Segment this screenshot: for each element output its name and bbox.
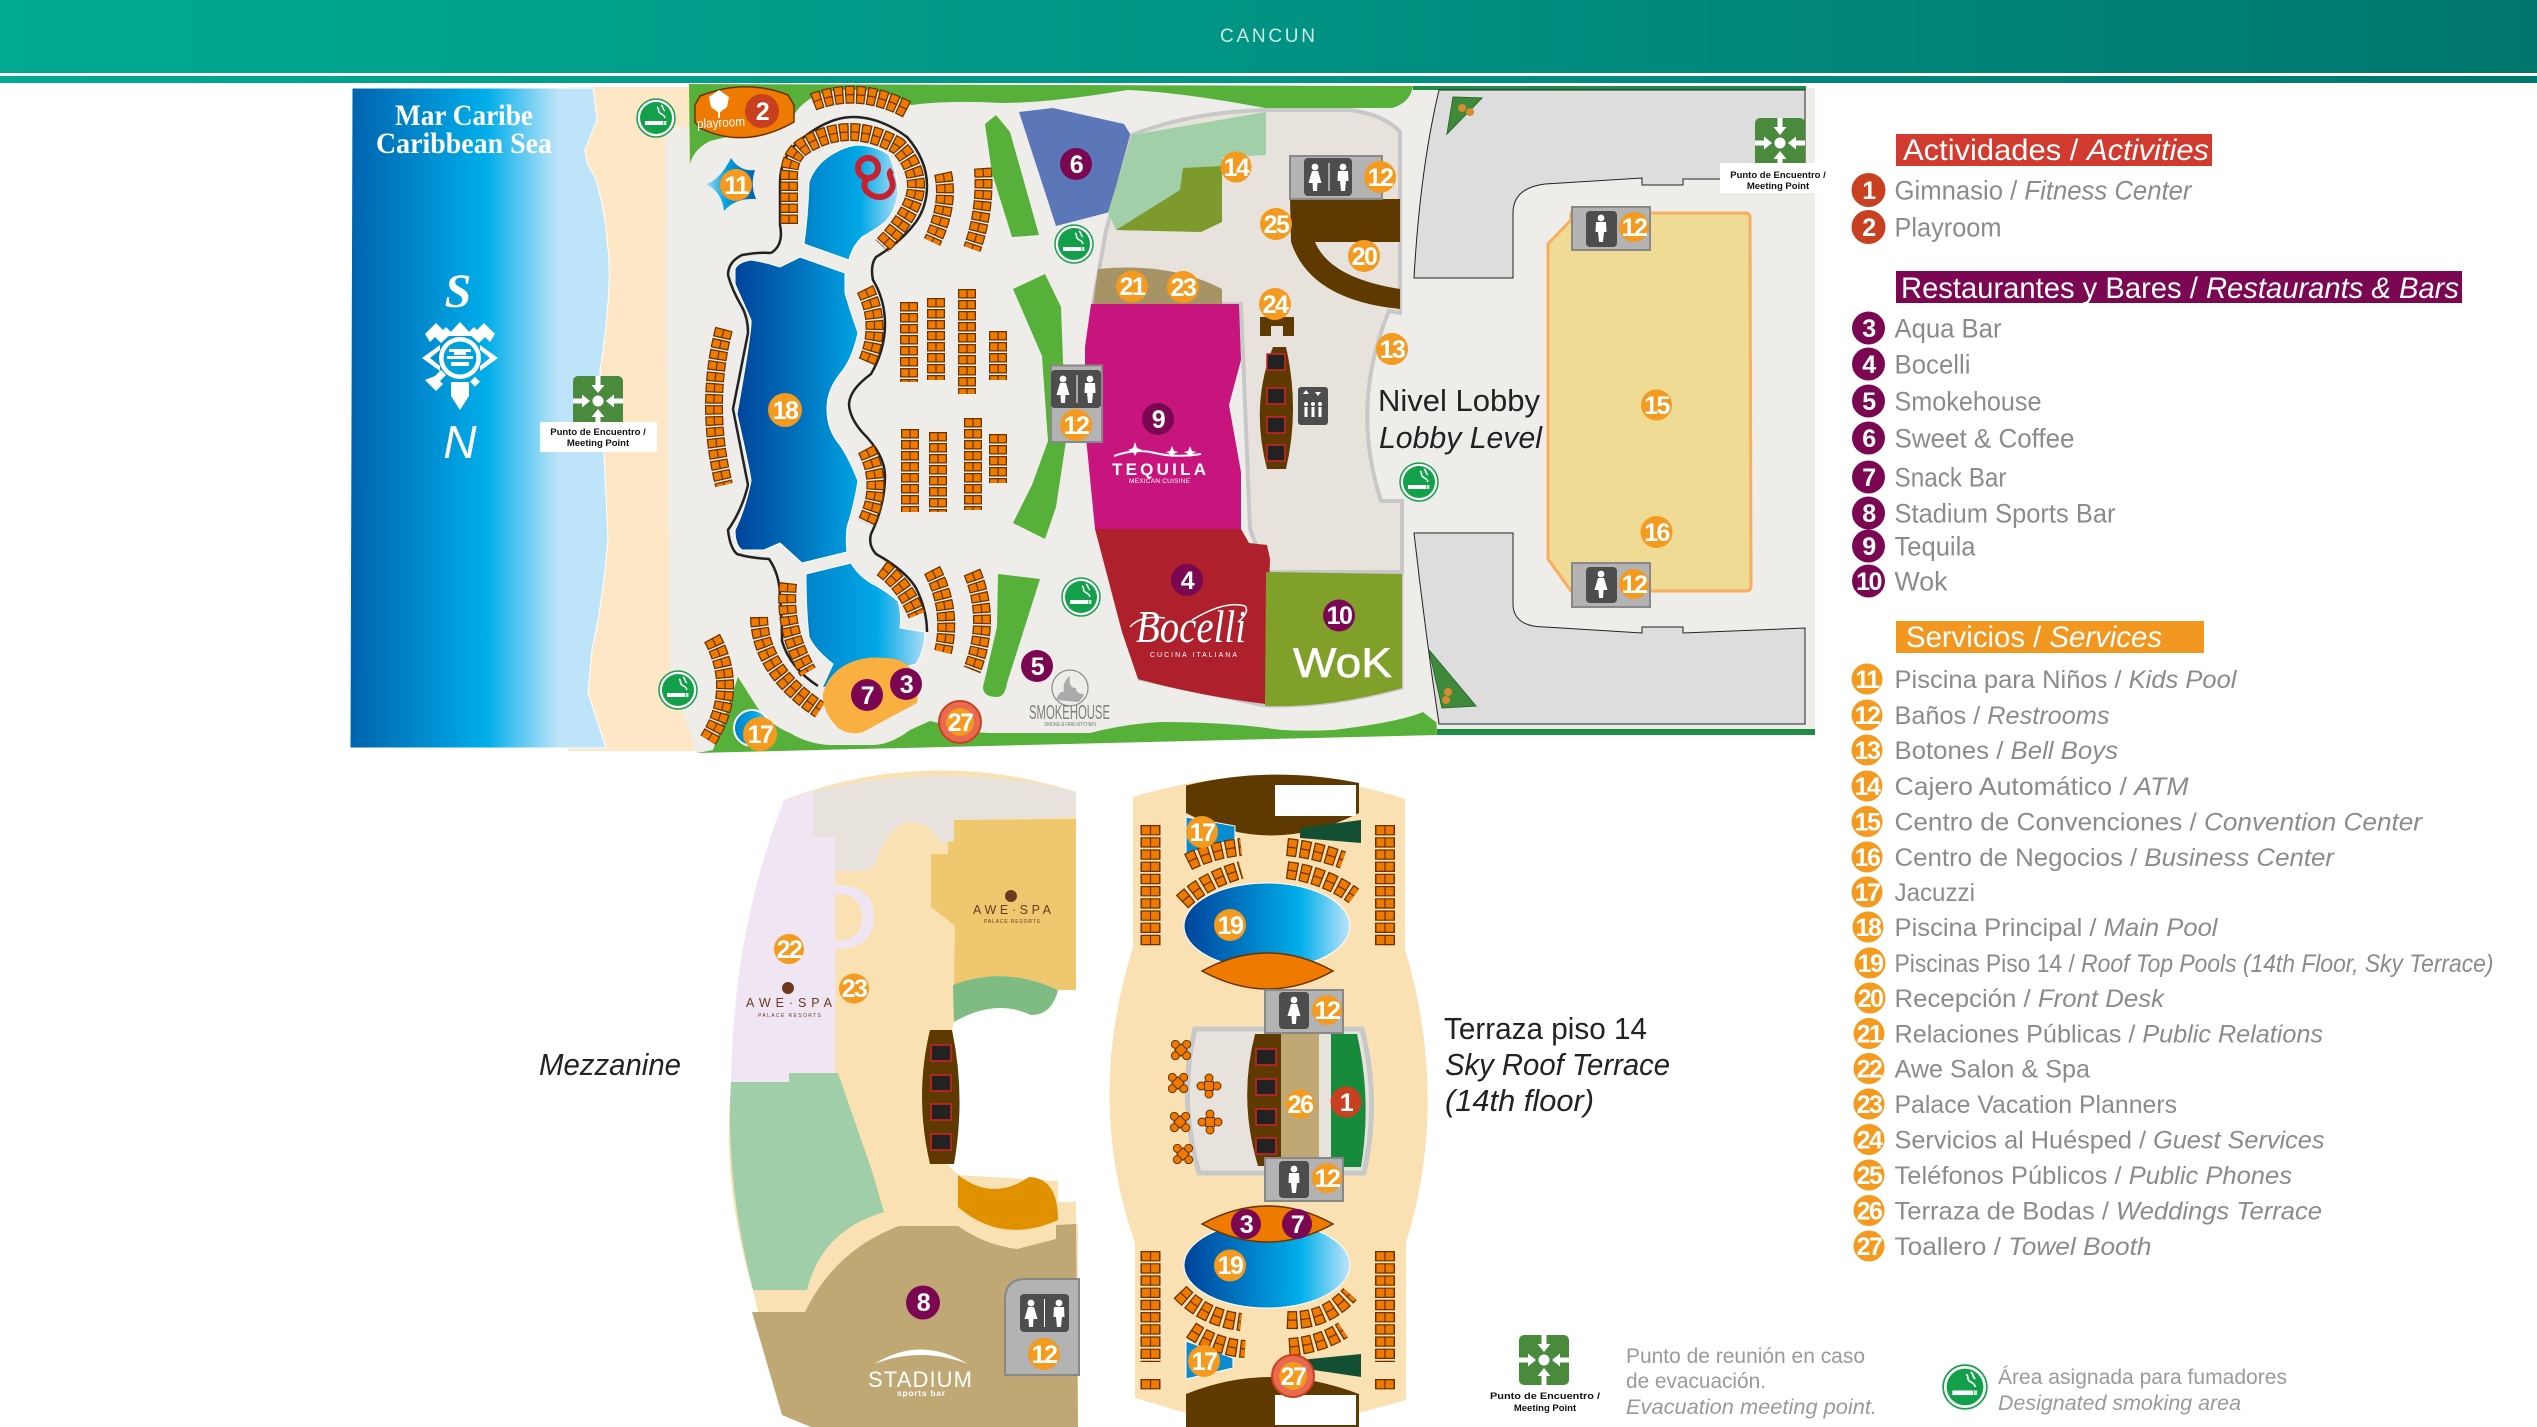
item 23: Palace Vacation Planners <box>1894 1091 2177 1119</box>
marker 12: 12 <box>1032 1341 1057 1369</box>
meeting point beach: Meeting Point <box>567 438 630 449</box>
item 27: 27 <box>1857 1233 1882 1261</box>
compass <box>422 265 498 468</box>
item 3 <box>1852 312 2002 344</box>
restroom west <box>1051 366 1102 442</box>
marker 7 <box>851 679 883 711</box>
restroom terrace north <box>1265 990 1343 1033</box>
terrace heading: Sky Roof Terrace <box>1445 1047 1670 1082</box>
compass: S <box>445 265 471 318</box>
item 13: Botones / Bell Boys <box>1894 737 2118 765</box>
bottom pool lobe <box>806 563 925 688</box>
marker 20 <box>1348 240 1380 272</box>
marker 13: 13 <box>1380 336 1405 364</box>
meeting point lobby: Meeting Point <box>1747 181 1810 192</box>
mezzanine base <box>729 770 1078 1427</box>
marker 19 <box>1214 1250 1246 1282</box>
marker 17: 17 <box>1192 1348 1217 1376</box>
marker 16 <box>1640 516 1672 548</box>
kids pool <box>706 158 756 211</box>
playroom: playroom <box>697 114 745 131</box>
lens bar north <box>1202 953 1333 989</box>
terrace heading: (14th floor) <box>1445 1083 1594 1118</box>
bocelli restaurant: CUCINA ITALIANA <box>1150 652 1237 659</box>
item 27: Toallero / Towel Booth <box>1894 1233 2152 1261</box>
smokehouse logo: SMOKE & FIRE KITCHEN <box>1044 722 1096 728</box>
tequila restaurant: TEQUILA <box>1112 460 1206 479</box>
sea label: Mar Caribe <box>395 99 533 132</box>
marker 7 <box>1282 1209 1312 1239</box>
terrace side sunbeds <box>1150 825 1385 1390</box>
item 20: 20 <box>1858 985 1883 1013</box>
playroom <box>695 87 794 138</box>
awe spa gym <box>931 819 1076 990</box>
marker 27: 27 <box>1281 1363 1306 1391</box>
marker 23: 23 <box>842 975 867 1003</box>
marker 8: 8 <box>917 1289 931 1317</box>
meeting point note: de evacuación. <box>1626 1370 1766 1393</box>
central block <box>1187 1029 1372 1173</box>
top pool lobe <box>804 145 898 260</box>
upper terrace <box>813 776 1076 871</box>
map markers <box>720 148 1672 751</box>
pool outline <box>728 117 927 686</box>
item 21: 21 <box>1857 1020 1883 1048</box>
north wing <box>1414 90 1805 278</box>
planter north <box>1447 97 1482 134</box>
bocelli restaurant <box>1095 529 1270 704</box>
terrace heading <box>1444 1011 1670 1118</box>
icon: smoking <box>1943 1365 1987 1409</box>
panel: legend restaurants <box>1852 271 2462 598</box>
wok restaurant <box>1265 572 1402 706</box>
marker 3: 3 <box>900 671 913 699</box>
marker 11 <box>720 169 752 201</box>
mezzanine elevators <box>922 1030 960 1164</box>
meeting point lobby: Punto de Encuentro / <box>1730 170 1826 181</box>
meeting point caption: Punto de Encuentro / <box>1490 1391 1600 1402</box>
marker 19: 19 <box>1218 1252 1243 1280</box>
south wing <box>1414 533 1805 724</box>
item 10: Wok <box>1894 566 1948 596</box>
header title: CANCUN <box>1220 26 1315 47</box>
item 14: Cajero Automático / ATM <box>1894 773 2189 801</box>
meeting point note <box>1626 1345 1877 1419</box>
item 16: Centro de Negocios / Business Center <box>1894 844 2336 872</box>
marker 17: 17 <box>1190 819 1215 847</box>
tequila restaurant <box>1085 304 1241 529</box>
marker 24: 24 <box>1263 291 1289 319</box>
marker 2: 2 <box>756 98 769 126</box>
item 14: 14 <box>1855 773 1881 801</box>
green terrace <box>953 976 1058 1022</box>
tequila restaurant: MEXICAN CUISINE <box>1129 478 1191 485</box>
compass: N <box>443 416 477 468</box>
item 25: Teléfonos Públicos / Public Phones <box>1894 1162 2292 1190</box>
lobby level heading: Nivel Lobby <box>1378 383 1540 418</box>
legend: smoking area <box>1943 1365 2287 1415</box>
marker 3 <box>1231 1209 1261 1239</box>
smoking note: Área asignada para fumadores <box>1998 1366 2287 1389</box>
meeting point caption: Meeting Point <box>1514 1403 1577 1414</box>
guest services desk <box>1260 317 1294 336</box>
elevator core <box>1260 347 1293 469</box>
marker 9: 9 <box>1152 406 1165 434</box>
sunbeds <box>708 95 998 740</box>
meeting point beach: Punto de Encuentro / <box>550 427 646 438</box>
terrace markers <box>1186 816 1362 1397</box>
marker 19: 19 <box>1218 912 1243 940</box>
terrace base <box>1109 776 1428 1427</box>
item 26: Terraza de Bodas / Weddings Terrace <box>1894 1198 2322 1226</box>
marker 10 <box>1323 600 1355 632</box>
marker 5 <box>1021 650 1053 682</box>
awe spa gym: AWE·SPA <box>973 903 1052 917</box>
meeting point note: Punto de reunión en caso <box>1626 1345 1865 1368</box>
item 17: 17 <box>1855 879 1880 907</box>
marker 12: 12 <box>1368 164 1393 192</box>
marker 8 <box>906 1286 940 1320</box>
public relations office <box>1093 268 1222 304</box>
marker 15: 15 <box>1644 392 1670 420</box>
sea label <box>376 99 552 160</box>
wok restaurant: WoK <box>1293 639 1392 686</box>
marker 10: 10 <box>1327 602 1352 630</box>
item 5 <box>1852 384 2042 418</box>
garden plots <box>983 115 1066 697</box>
item 17 <box>1852 876 1975 908</box>
marker 24 <box>1259 288 1291 320</box>
bocelli restaurant: Bocelli <box>1136 601 1246 652</box>
item 10 <box>1852 564 1948 598</box>
panel: sky roof terrace <box>1109 775 1670 1427</box>
restroom terrace south <box>1265 1158 1343 1201</box>
north deck structure <box>1186 775 1359 836</box>
item 24: 24 <box>1857 1126 1883 1154</box>
item 24: Servicios al Huésped / Guest Services <box>1894 1126 2324 1154</box>
marker 6: 6 <box>1070 151 1083 179</box>
marker 17: 17 <box>748 721 773 749</box>
marker 21 <box>1116 270 1148 302</box>
lounge tables <box>1161 1033 1222 1171</box>
restroom top <box>1290 156 1396 199</box>
smoking note: Designated smoking area <box>1998 1392 2241 1415</box>
item 5: 5 <box>1862 388 1876 416</box>
atm lawn <box>1108 112 1266 232</box>
lobby floor <box>1093 110 1402 572</box>
item 1: Gimnasio / Fitness Center <box>1894 176 2192 206</box>
marker 3 <box>890 668 922 700</box>
lens bar south <box>1202 1206 1333 1242</box>
marker 25 <box>1260 208 1292 240</box>
marker 1: 1 <box>1340 1089 1354 1117</box>
jacuzzis terrace <box>1186 817 1235 1379</box>
item 25: 25 <box>1857 1162 1883 1190</box>
item 5: Smokehouse <box>1894 386 2042 416</box>
marker 14: 14 <box>1224 154 1250 182</box>
item 4: 4 <box>1862 351 1876 379</box>
stadium sports bar <box>752 1224 1078 1427</box>
awe spa salon: PALACE RESORTS <box>758 1013 822 1019</box>
panel: lobby level map <box>350 84 1826 753</box>
marker 12: 12 <box>1622 571 1647 599</box>
ground <box>665 86 1815 753</box>
restroom convention north <box>1572 207 1650 250</box>
water slide <box>858 158 893 197</box>
heading restaurants: Restaurantes y Bares / Restaurants & Bars <box>1901 272 2459 305</box>
heading activities: Actividades / Activities <box>1903 134 2209 167</box>
elevator sign <box>1298 387 1328 425</box>
item 18: Piscina Principal / Main Pool <box>1894 914 2219 942</box>
sea label: Caribbean Sea <box>376 127 552 160</box>
caribbean sea <box>350 88 609 748</box>
marker 20: 20 <box>1352 243 1377 271</box>
marker 25: 25 <box>1264 211 1290 239</box>
smokehouse logo: SMOKEHOUSE <box>1029 702 1110 724</box>
heading services: Servicios / Services <box>1906 621 2162 654</box>
item 19: 19 <box>1858 950 1883 978</box>
restroom convention south <box>1572 563 1650 607</box>
lobby level heading: Lobby Level <box>1379 420 1543 455</box>
front desk <box>1290 199 1400 309</box>
item 6: Sweet & Coffee <box>1894 424 2074 454</box>
beach sand <box>568 87 703 751</box>
panel: legend activities <box>1852 134 2212 244</box>
item 1: 1 <box>1862 177 1876 205</box>
item 8: 8 <box>1862 500 1876 528</box>
terrace pool sunbeds <box>1180 847 1354 1349</box>
item 4: Bocelli <box>1894 350 1970 380</box>
item 6: 6 <box>1862 425 1875 453</box>
item 11: Piscina para Niños / Kids Pool <box>1894 666 2238 694</box>
item 12: Baños / Restrooms <box>1894 702 2110 730</box>
marker 18: 18 <box>773 397 799 425</box>
boundary bands <box>1413 86 1815 735</box>
dark green planters <box>1300 820 1361 1377</box>
meeting point caption <box>1490 1391 1600 1414</box>
marker 4 <box>1171 564 1203 596</box>
marker 27: 27 <box>948 709 973 737</box>
marker 27 <box>939 701 981 743</box>
item 11: 11 <box>1855 666 1880 694</box>
marker 7: 7 <box>861 682 874 710</box>
marker 11: 11 <box>724 172 749 200</box>
marker 5: 5 <box>1031 653 1045 681</box>
marker 27 <box>1272 1355 1314 1397</box>
marker 4: 4 <box>1181 567 1195 595</box>
item 20: Recepción / Front Desk <box>1894 985 2166 1013</box>
marker 12: 12 <box>1315 1165 1340 1193</box>
marker 21: 21 <box>1120 273 1146 301</box>
item 19: Piscinas Piso 14 / Roof Top Pools (14th Floor, Sky Terrace) <box>1894 950 2494 978</box>
item 12: 12 <box>1855 702 1880 730</box>
smoking icons map <box>637 99 1438 709</box>
marker 19 <box>1214 909 1246 941</box>
item 9: 9 <box>1862 533 1875 561</box>
item 9: Tequila <box>1894 532 1976 562</box>
south deck structure <box>1186 1377 1359 1427</box>
smokehouse logo <box>1029 670 1110 728</box>
item 7: Snack Bar <box>1894 462 2007 492</box>
marker 18 <box>768 393 802 427</box>
item 3: Aqua Bar <box>1894 314 2002 344</box>
marker 1 <box>1330 1086 1362 1118</box>
meeting point beach <box>540 376 657 452</box>
item 7 <box>1852 460 2007 494</box>
rooftop pool north <box>1184 883 1350 969</box>
item 18: 18 <box>1856 914 1882 942</box>
marker 16: 16 <box>1644 519 1669 547</box>
rooftop pool south <box>1184 1222 1350 1308</box>
sweet and coffee <box>1019 108 1132 226</box>
terrace heading: Terraza piso 14 <box>1444 1011 1647 1046</box>
marker 12: 12 <box>1315 997 1340 1025</box>
olive garden <box>1116 166 1222 232</box>
mezzanine restroom <box>1005 1279 1079 1375</box>
meeting point lobby <box>1720 118 1826 193</box>
item 2: 2 <box>1862 214 1875 242</box>
item 10: 10 <box>1856 568 1881 596</box>
item 4 <box>1852 348 1970 380</box>
awe spa salon <box>731 791 874 1082</box>
awe spa salon: AWE·SPA <box>746 996 833 1010</box>
item 13: 13 <box>1855 737 1880 765</box>
marker 3: 3 <box>1240 1211 1253 1239</box>
meeting point note: Evacuation meeting point. <box>1626 1396 1877 1419</box>
convention center <box>1548 213 1751 591</box>
orange terrace <box>958 1175 1058 1230</box>
marker 23: 23 <box>1171 274 1196 302</box>
marker 7: 7 <box>1291 1211 1304 1239</box>
item 22: Awe Salon & Spa <box>1894 1056 2090 1084</box>
legend: meeting point <box>1490 1335 1877 1419</box>
marker 12: 12 <box>1622 214 1647 242</box>
item 2: Playroom <box>1894 212 2002 242</box>
marker 17 <box>1186 816 1218 848</box>
item 7: 7 <box>1862 464 1875 492</box>
panel: mezzanine floor <box>539 770 1079 1427</box>
item 8: Stadium Sports Bar <box>1894 498 2116 528</box>
green gardens <box>689 84 1437 753</box>
marker 12: 12 <box>1064 412 1089 440</box>
item 23: 23 <box>1857 1091 1882 1119</box>
marker 22: 22 <box>777 936 802 964</box>
item 16: 16 <box>1855 844 1880 872</box>
panel: legend services <box>1852 621 2494 1262</box>
main pool <box>735 257 858 563</box>
header bar <box>0 0 2537 83</box>
mint garden <box>730 1073 884 1290</box>
item 3: 3 <box>1862 315 1875 343</box>
item 9 <box>1852 530 1976 562</box>
awe spa gym: PALACE RESORTS <box>984 919 1041 925</box>
lobby level heading <box>1378 383 1543 455</box>
item 15: 15 <box>1855 808 1881 836</box>
stadium sports bar: STADIUM <box>868 1367 972 1392</box>
stadium sports bar: sports bar <box>897 1388 946 1398</box>
item 17: Jacuzzi <box>1894 879 1975 907</box>
item 21: Relaciones Públicas / Public Relations <box>1894 1020 2323 1048</box>
jacuzzi <box>734 710 770 746</box>
planter south <box>1429 650 1476 708</box>
smoking note <box>1998 1366 2287 1415</box>
marker 6 <box>1060 148 1092 180</box>
mezzanine heading: Mezzanine <box>539 1047 681 1082</box>
marker 13 <box>1376 333 1408 365</box>
marker 9 <box>1142 403 1174 435</box>
item 2 <box>1852 210 2002 244</box>
mezzanine atrium <box>947 990 1077 1202</box>
item 22: 22 <box>1857 1056 1882 1084</box>
icon: meeting point <box>1519 1335 1569 1385</box>
marker 17 <box>743 717 777 751</box>
marker 26: 26 <box>1288 1091 1313 1119</box>
marker 23 <box>1167 271 1199 303</box>
item 15: Centro de Convenciones / Convention Center <box>1894 808 2424 836</box>
item 26: 26 <box>1857 1198 1882 1226</box>
snack bar patio <box>823 657 918 733</box>
marker 17 <box>1188 1345 1220 1377</box>
